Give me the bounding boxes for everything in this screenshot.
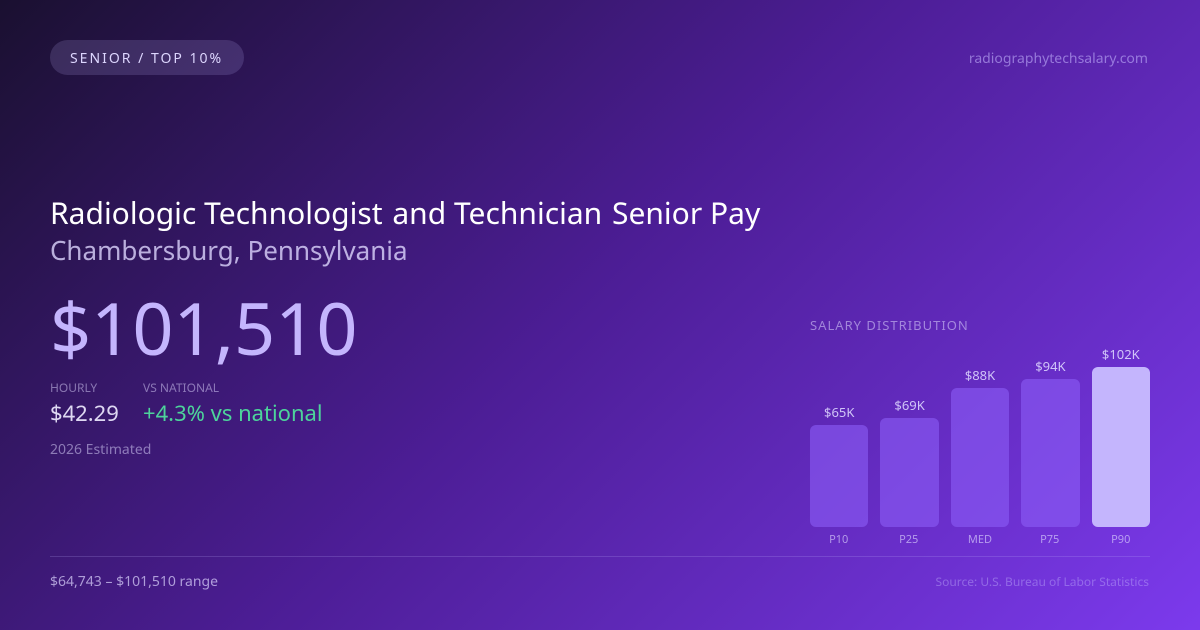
label median: MED (968, 532, 992, 546)
bar P25 (880, 418, 939, 527)
value P90: $102K (1102, 345, 1140, 363)
bar P10 (810, 425, 868, 527)
hourly value: $42.29 (50, 398, 119, 428)
stat: hourly (50, 379, 119, 428)
label P75: P75 (1040, 532, 1059, 546)
year note: 2026 Estimated (50, 440, 151, 459)
bar median (951, 388, 1009, 527)
badge: senior / top 10%: SENIOR / TOP 10% (70, 49, 223, 68)
main salary figure: $101,510 (50, 279, 358, 377)
stat: vs national (143, 379, 323, 428)
badge: senior / top 10% (50, 40, 244, 75)
value P75: $94K (1035, 357, 1066, 375)
title: Radiologic Technologist and Technician Senior Pay (50, 192, 760, 233)
bar P90 (1092, 367, 1150, 527)
site domain: radiographytechsalary.com (969, 49, 1148, 68)
hourly label: HOURLY (50, 379, 97, 396)
value P25: $69K (894, 396, 925, 414)
label P25: P25 (899, 532, 918, 546)
label P10: P10 (829, 532, 848, 546)
chart heading: salary distribution: SALARY DISTRIBUTION (810, 316, 969, 334)
label P90: P90 (1111, 532, 1130, 546)
source text: Source: U.S. Bureau of Labor Statistics (936, 573, 1149, 590)
subtitle: location: Chambersburg, Pennsylvania (50, 232, 408, 268)
vs national label: VS NATIONAL (143, 379, 219, 396)
bar P75 (1021, 379, 1080, 527)
value median: $88K (965, 366, 995, 384)
vs national value: +4.3% vs national (143, 398, 323, 428)
value P10: $65K (824, 403, 854, 421)
range text: $64,743 – $101,510 range (50, 572, 218, 591)
